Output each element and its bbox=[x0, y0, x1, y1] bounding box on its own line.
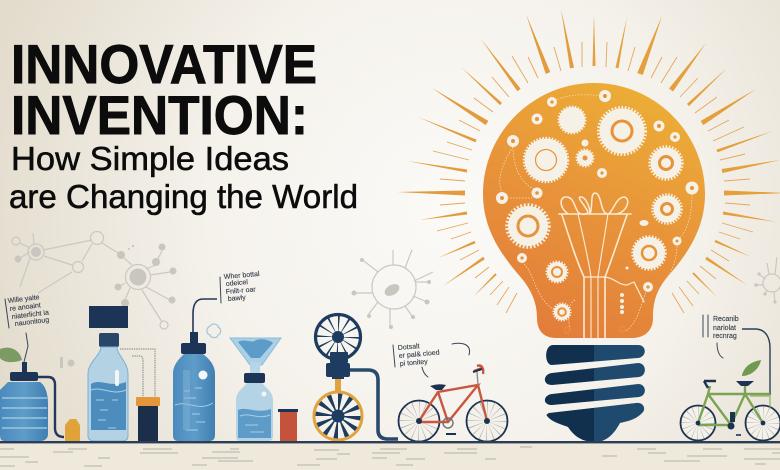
annotation: bottle note: bawly bbox=[228, 294, 247, 303]
top navy wheel bbox=[316, 314, 360, 360]
light rays left bbox=[397, 9, 582, 313]
virus-like network node bbox=[352, 250, 433, 329]
annotation: recycling note: recnrag bbox=[713, 333, 737, 340]
annotation: jug note: nauonitoug bbox=[14, 317, 50, 328]
water jug with leaf bbox=[0, 333, 48, 441]
gears inside bulb bbox=[500, 95, 692, 332]
annotation: bike note bbox=[393, 343, 470, 377]
annotation: recycling note: Recanib bbox=[713, 316, 739, 323]
annotation: jug note: re anoaint bbox=[9, 302, 41, 313]
title: How Simple Ideas bbox=[11, 140, 289, 177]
bulb screw base bbox=[545, 345, 645, 442]
network node right edge bbox=[754, 257, 780, 304]
annotation: bike note: er pal& cloed bbox=[399, 349, 440, 360]
red bicycle bbox=[398, 366, 508, 442]
title: are Changing the World bbox=[9, 178, 358, 215]
annotation: bottle note: Fnilt-r oar bbox=[226, 286, 257, 296]
floor dashes bbox=[0, 447, 780, 466]
annotation: jug note bbox=[5, 294, 50, 328]
green bicycle bbox=[680, 329, 780, 440]
red canister bbox=[278, 409, 298, 442]
annotation: jug note: niaterlicht ia bbox=[11, 309, 49, 321]
annotation: bike note: pi tonitey bbox=[400, 359, 429, 368]
floor strip bbox=[0, 442, 780, 470]
annotation: bottle note: odeicel bbox=[226, 279, 249, 288]
funnel bottle bbox=[230, 338, 281, 441]
annotation: bottle note: Wher bottal bbox=[224, 271, 260, 281]
machine press block bbox=[326, 352, 350, 391]
title: INVENTION: bbox=[11, 84, 308, 146]
filament bbox=[559, 193, 644, 338]
blue bottle with tube bbox=[173, 299, 217, 441]
annotation: bike note: Dotsalt bbox=[398, 343, 420, 352]
title bbox=[9, 33, 358, 215]
small cloud icon bbox=[207, 324, 221, 338]
annotation: bottle note bbox=[220, 271, 260, 303]
orange cap canister with wires bbox=[120, 349, 160, 442]
annotation: recycling note: nariolat bbox=[713, 325, 736, 332]
light rays right bbox=[592, 15, 780, 313]
tall clear bottle with cap bbox=[88, 306, 128, 441]
network diagram left bbox=[12, 232, 176, 368]
floor line bbox=[0, 441, 780, 443]
hose and gold connector bbox=[38, 377, 80, 441]
pipe bbox=[350, 370, 398, 439]
small nodes inside bulb bbox=[496, 90, 698, 333]
annotation: recycling note bbox=[703, 315, 739, 358]
light bulb glass bbox=[483, 83, 705, 338]
bottom gold wheel bbox=[314, 392, 362, 440]
title: INNOVATIVE bbox=[11, 33, 317, 95]
annotation: jug note: Wille yaite bbox=[7, 294, 40, 305]
